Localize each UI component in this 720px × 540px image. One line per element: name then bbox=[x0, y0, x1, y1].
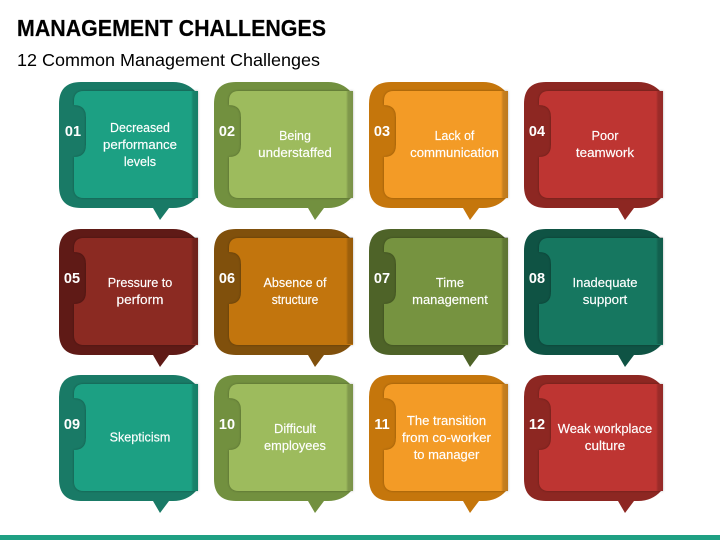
number 05: 05 bbox=[64, 271, 80, 287]
label 07 bbox=[412, 275, 488, 307]
label 08: Inadequate bbox=[572, 275, 638, 290]
number 07: 07 bbox=[374, 271, 390, 287]
label 04: Poor bbox=[592, 128, 619, 143]
label 02 bbox=[258, 128, 332, 160]
label 01: Decreased bbox=[110, 120, 170, 135]
card 01 bbox=[59, 82, 198, 220]
bottom bar bbox=[0, 535, 720, 540]
label 10 bbox=[264, 421, 326, 453]
title: MANAGEMENT CHALLENGES bbox=[17, 15, 326, 41]
label 01 bbox=[103, 120, 177, 169]
label 02: Being bbox=[279, 128, 311, 143]
label 05 bbox=[108, 275, 172, 307]
card 10 bbox=[214, 375, 353, 513]
number 01: 01 bbox=[65, 124, 81, 140]
card 03 bbox=[369, 82, 508, 220]
label 12 bbox=[558, 421, 652, 453]
label 08 bbox=[572, 275, 638, 307]
card 06 bbox=[214, 229, 353, 367]
label 06: structure bbox=[272, 292, 318, 307]
label 05: perform bbox=[117, 292, 163, 307]
label 11: to manager bbox=[414, 447, 480, 462]
label 12: Weak workplace bbox=[558, 421, 652, 436]
card 07 bbox=[369, 229, 508, 367]
card 02 bbox=[214, 82, 353, 220]
label 09: Skepticism bbox=[110, 430, 170, 444]
number 10: 10 bbox=[219, 417, 235, 433]
label 02: understaffed bbox=[258, 145, 332, 160]
number 09: 09 bbox=[64, 417, 80, 433]
label 03: communication bbox=[410, 145, 499, 160]
card 11 bbox=[369, 375, 508, 513]
label 07: Time bbox=[436, 275, 464, 290]
label 06: Absence of bbox=[264, 275, 327, 290]
number 11: 11 bbox=[374, 417, 390, 433]
label 11 bbox=[402, 413, 492, 462]
label 11: from co-worker bbox=[402, 430, 492, 445]
number 08: 08 bbox=[529, 271, 545, 287]
label 10: Difficult bbox=[274, 421, 316, 436]
label 10: employees bbox=[264, 438, 326, 453]
subtitle: 12 Common Management Challenges bbox=[17, 50, 320, 70]
label 01: levels bbox=[124, 154, 157, 169]
number 02: 02 bbox=[219, 124, 235, 140]
card 09 bbox=[59, 375, 198, 513]
label 06 bbox=[264, 275, 327, 307]
label 05: Pressure to bbox=[108, 275, 172, 290]
label 04 bbox=[576, 128, 635, 160]
card 12 bbox=[524, 375, 663, 513]
number 06: 06 bbox=[219, 271, 235, 287]
label 11: The transition bbox=[407, 413, 486, 428]
number 04: 04 bbox=[529, 124, 545, 140]
label 03 bbox=[410, 128, 499, 160]
label 07: management bbox=[412, 292, 488, 307]
number 12: 12 bbox=[529, 417, 545, 433]
card 05 bbox=[59, 229, 198, 367]
card 08 bbox=[524, 229, 663, 367]
label 04: teamwork bbox=[576, 145, 635, 160]
label 03: Lack of bbox=[435, 128, 475, 143]
number 03: 03 bbox=[374, 124, 390, 140]
label 12: culture bbox=[585, 438, 625, 453]
card 04 bbox=[524, 82, 663, 220]
label 08: support bbox=[583, 292, 628, 307]
label 01: performance bbox=[103, 137, 177, 152]
